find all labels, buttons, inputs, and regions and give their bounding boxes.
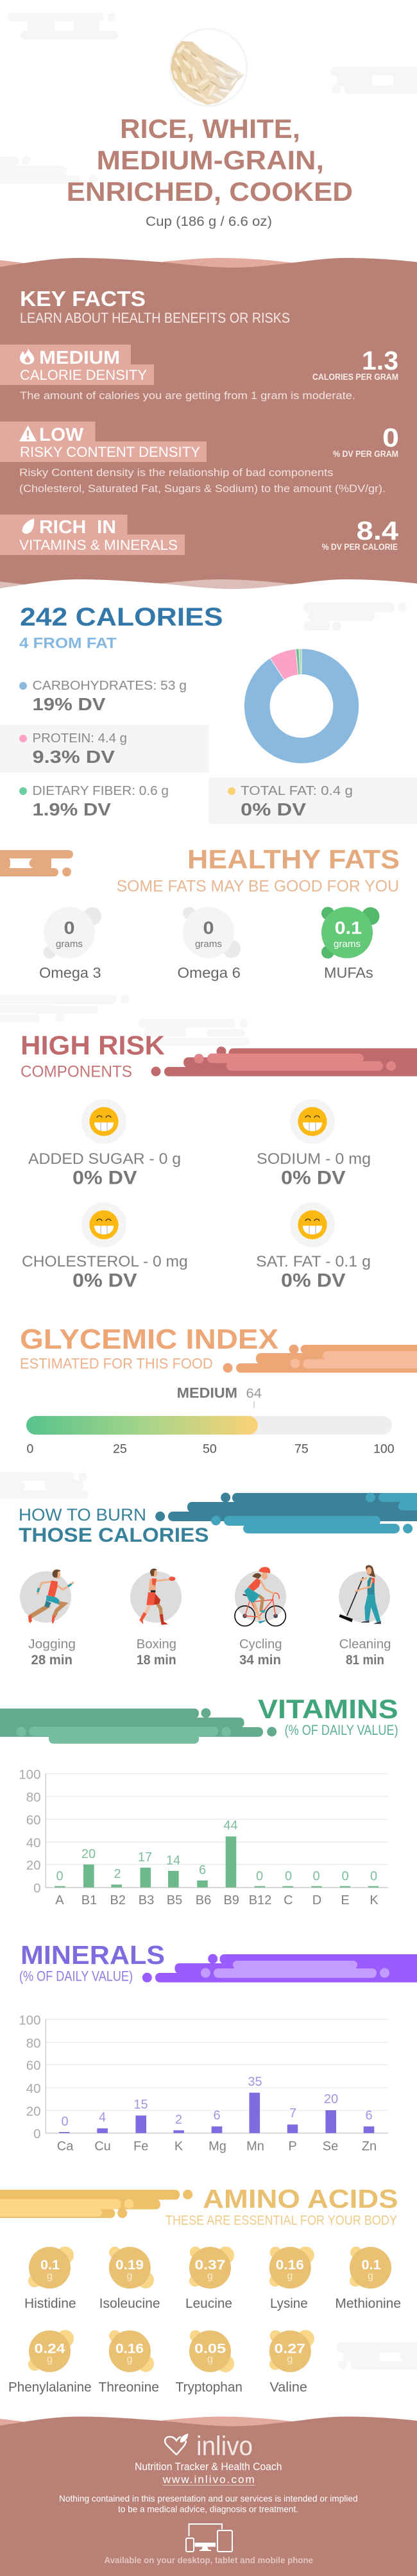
bar chart: minerals bbox=[19, 2013, 388, 2154]
amino: leucine: g bbox=[207, 2271, 213, 2282]
bar chart: vitamins: 20 bbox=[81, 1847, 96, 1861]
amino: phenylalanine: 0.24 bbox=[35, 2341, 65, 2356]
serving size: Cup (186 g / 6.6 oz) bbox=[146, 214, 272, 229]
icon: person sweeping bbox=[339, 1565, 390, 1624]
healthy fats heading: HEALTHY FATS bbox=[187, 844, 400, 874]
activity: jogging: Jogging bbox=[28, 1637, 76, 1651]
unit: calories per gram: CALORIES PER GRAM bbox=[312, 372, 398, 382]
logo: inlivo bbox=[165, 2431, 253, 2461]
icon: grinning face bbox=[81, 1099, 126, 1144]
decorative cloud: top right bbox=[330, 67, 417, 94]
decorative bars bbox=[0, 2190, 192, 2218]
bar chart: vitamins bbox=[19, 1768, 388, 1907]
bar chart: vitamins: 0 bbox=[341, 1870, 349, 1884]
icon: warning triangle bbox=[19, 425, 37, 441]
decorative cloud bbox=[336, 2342, 417, 2369]
website link: www.inlivo.com bbox=[162, 2473, 255, 2486]
bar chart: vitamins: B9 bbox=[223, 1893, 239, 1907]
unit: dv per gram: % DV PER GRAM bbox=[333, 449, 398, 459]
amino: threonine: g bbox=[127, 2354, 132, 2365]
bar chart: minerals: 20 bbox=[324, 2092, 338, 2106]
bar chart: minerals: Ca bbox=[57, 2140, 74, 2154]
unit: dv per calorie: % DV PER CALORIE bbox=[322, 542, 398, 552]
amino: methionine: Methionine bbox=[335, 2296, 401, 2311]
panel: high risk components bbox=[21, 1030, 417, 1292]
bar chart: vitamins: 0 bbox=[285, 1870, 292, 1884]
amino: leucine: 0.37 bbox=[195, 2257, 226, 2273]
amino: threonine: Threonine bbox=[98, 2380, 159, 2394]
panel: calories bbox=[0, 602, 417, 824]
calories heading: 242 CALORIES bbox=[20, 603, 223, 631]
panel: amino acids bbox=[0, 2184, 417, 2394]
legend: total fat: 0% DV bbox=[241, 799, 306, 819]
bar chart: minerals: 7 bbox=[289, 2106, 296, 2120]
stat: omega 3: grams bbox=[56, 939, 83, 950]
legend: dietary fiber bbox=[19, 784, 169, 819]
stat: omega 3 bbox=[39, 907, 101, 981]
amino: leucine: Leucine bbox=[185, 2296, 232, 2311]
components subheading: COMPONENTS bbox=[21, 1062, 132, 1080]
bar chart: minerals: 0 bbox=[61, 2115, 69, 2129]
logo: inlivo: inlivo bbox=[196, 2431, 253, 2461]
bar chart: minerals: 6 bbox=[213, 2108, 221, 2122]
availability note: Available on your desktop, tablet and mobile phone bbox=[104, 2555, 313, 2565]
item: added sugar: ADDED SUGAR - 0 g bbox=[28, 1150, 181, 1168]
decorative cloud bbox=[0, 1472, 89, 1499]
bar chart: minerals: Se bbox=[323, 2140, 338, 2154]
amino: isoleucine bbox=[99, 2247, 160, 2311]
amino: valine: g bbox=[287, 2354, 293, 2365]
description bbox=[19, 466, 386, 495]
bar chart: vitamins: 0 bbox=[256, 1870, 263, 1884]
title: RICE, WHITE, bbox=[120, 114, 300, 144]
bar chart: vitamins: 0 bbox=[33, 1881, 41, 1896]
legend highlight: protein row bbox=[0, 725, 209, 772]
amino: phenylalanine: Phenylalanine bbox=[8, 2380, 92, 2394]
bar chart: vitamins: 17 bbox=[138, 1850, 152, 1864]
icon: devices bbox=[186, 2524, 232, 2552]
activity: cycling bbox=[235, 1567, 286, 1668]
label: vitamins and minerals: VITAMINS & MINERALS bbox=[19, 537, 178, 553]
icon: grinning face bbox=[81, 1202, 126, 1247]
item: added sugar bbox=[28, 1099, 181, 1189]
bar chart: minerals: 20 bbox=[26, 2104, 41, 2119]
legend: carbohydrates bbox=[19, 679, 187, 714]
high risk heading: HIGH RISK bbox=[21, 1030, 165, 1060]
healthy fats subheading: SOME FATS MAY BE GOOD FOR YOU bbox=[117, 878, 399, 896]
stat: omega 6: 0 bbox=[203, 917, 214, 938]
rating value: 64 bbox=[246, 1386, 262, 1401]
how to burn heading: HOW TO BURN bbox=[19, 1505, 146, 1524]
amino: threonine bbox=[98, 2330, 159, 2394]
amino: lysine: g bbox=[287, 2271, 293, 2282]
bar chart: minerals: 15 bbox=[133, 2098, 148, 2112]
amino: valine: Valine bbox=[269, 2380, 307, 2394]
item: saturated fat bbox=[256, 1202, 371, 1292]
fact: calorie density bbox=[0, 345, 398, 402]
stat: mufas bbox=[321, 907, 380, 981]
those calories heading: THOSE CALORIES bbox=[19, 1523, 209, 1546]
amino: valine: 0.27 bbox=[275, 2341, 305, 2356]
amino: tryptophan: g bbox=[207, 2354, 213, 2365]
gauge bar bbox=[26, 1416, 392, 1435]
glycemic index heading: GLYCEMIC INDEX bbox=[20, 1324, 278, 1355]
item: cholesterol: CHOLESTEROL - 0 mg bbox=[22, 1253, 188, 1270]
amino: histidine: g bbox=[47, 2271, 53, 2282]
decorative bars bbox=[223, 1345, 417, 1373]
amino: isoleucine: 0.19 bbox=[115, 2257, 144, 2273]
bar chart: minerals: 100 bbox=[19, 2013, 41, 2027]
icon: grinning face bbox=[290, 1099, 335, 1144]
panel: minerals bbox=[19, 1940, 417, 2154]
item: saturated fat: SAT. FAT - 0.1 g bbox=[256, 1253, 371, 1270]
bar chart: vitamins: 44 bbox=[223, 1819, 238, 1833]
amino: valine bbox=[269, 2330, 314, 2394]
title bbox=[67, 114, 353, 207]
bar chart: vitamins: B6 bbox=[196, 1893, 211, 1907]
amino: isoleucine: Isoleucine bbox=[99, 2296, 160, 2311]
bar chart: minerals: 4 bbox=[99, 2111, 106, 2125]
activity: cycling: Cycling bbox=[239, 1637, 282, 1651]
bar chart: vitamins: B1 bbox=[81, 1893, 97, 1907]
rating label: MEDIUM bbox=[177, 1385, 237, 1401]
activity: boxing bbox=[130, 1569, 182, 1668]
bar chart: vitamins: 2 bbox=[114, 1867, 121, 1881]
stat: mufas: MUFAs bbox=[324, 964, 373, 981]
item: cholesterol bbox=[22, 1202, 188, 1292]
amino: tryptophan bbox=[176, 2330, 243, 2394]
bar chart: vitamins: 14 bbox=[166, 1854, 180, 1868]
disclaimer bbox=[59, 2493, 358, 2514]
amino: lysine: 0.16 bbox=[276, 2257, 304, 2273]
wave bottom of key facts bbox=[0, 579, 417, 597]
disclaimer: Nothing contained in this presentation and our services is intended or implied bbox=[59, 2493, 358, 2503]
legend: carbohydrates: 19% DV bbox=[32, 694, 106, 714]
item: saturated fat: 0% DV bbox=[281, 1270, 346, 1292]
panel: footer bbox=[0, 2416, 417, 2576]
activity: jogging: 28 min bbox=[31, 1653, 72, 1668]
amino: lysine: Lysine bbox=[270, 2296, 308, 2311]
bar chart: vitamins: 100 bbox=[19, 1768, 41, 1782]
legend: total fat bbox=[228, 784, 353, 819]
legend: protein: 9.3% DV bbox=[32, 747, 115, 767]
panel: how to burn those calories bbox=[19, 1492, 417, 1668]
key facts heading: KEY FACTS bbox=[20, 287, 146, 311]
item: sodium: 0% DV bbox=[281, 1168, 346, 1189]
bar chart: vitamins: E bbox=[341, 1893, 350, 1907]
bar chart: minerals: K bbox=[174, 2140, 183, 2154]
bar chart: minerals: Zn bbox=[362, 2140, 377, 2154]
rating: low: LOW bbox=[39, 425, 84, 445]
bar chart: minerals: 0 bbox=[33, 2127, 41, 2142]
activity: cleaning: 81 min bbox=[346, 1653, 384, 1668]
bar chart: minerals: 35 bbox=[248, 2075, 262, 2089]
amino: leucine bbox=[185, 2247, 234, 2311]
legend: protein bbox=[19, 731, 127, 767]
bar chart: vitamins: B5 bbox=[167, 1893, 182, 1907]
key facts subheading: LEARN ABOUT HEALTH BENEFITS OR RISKS bbox=[20, 310, 290, 326]
amino: threonine: 0.16 bbox=[115, 2341, 144, 2356]
amino: phenylalanine bbox=[8, 2330, 92, 2394]
stat: mufas: 0.1 bbox=[335, 917, 362, 938]
icon: leaf bbox=[22, 518, 34, 534]
activity: cycling: 34 min bbox=[239, 1653, 281, 1668]
donut chart bbox=[244, 649, 359, 763]
amino: methionine: g bbox=[368, 2271, 373, 2282]
activity: cleaning bbox=[339, 1565, 391, 1668]
food photo: rice in circle bbox=[169, 29, 247, 107]
decorative cloud bbox=[303, 602, 407, 631]
description: The amount of calories you are getting from 1 gram is moderate. bbox=[20, 389, 355, 402]
gauge scale labels: 75 bbox=[294, 1442, 309, 1456]
bar chart: vitamins: 0 bbox=[312, 1870, 320, 1884]
decorative bars bbox=[0, 850, 73, 876]
description: (Cholesterol, Saturated Fat, Sugars & Sodium) to the amount (%DV/gr). bbox=[19, 482, 386, 495]
icon: flame bbox=[20, 348, 34, 364]
bar chart: vitamins: 6 bbox=[199, 1863, 206, 1877]
item: sodium: SODIUM - 0 mg bbox=[257, 1150, 371, 1168]
stat: omega 6: Omega 6 bbox=[177, 964, 241, 981]
value: 8.4: 8.4 bbox=[357, 516, 398, 545]
vitamins heading: VITAMINS bbox=[258, 1694, 398, 1724]
wave top of footer bbox=[0, 2416, 417, 2576]
legend: total fat: TOTAL FAT: 0.4 g bbox=[241, 784, 353, 798]
bar chart: minerals: Mg bbox=[208, 2140, 226, 2154]
item: added sugar: 0% DV bbox=[72, 1168, 137, 1189]
title: ENRICHED, COOKED bbox=[67, 176, 353, 207]
stat: omega 3: Omega 3 bbox=[39, 964, 101, 981]
decorative bars bbox=[142, 1954, 417, 1983]
bar chart: minerals: 40 bbox=[26, 2081, 41, 2096]
gauge scale labels: 25 bbox=[113, 1442, 127, 1456]
stat: mufas: grams bbox=[334, 939, 361, 950]
bar chart: vitamins: C bbox=[284, 1893, 293, 1907]
amino acids heading: AMINO ACIDS bbox=[203, 2184, 398, 2213]
legend: carbohydrates: CARBOHYDRATES: 53 g bbox=[32, 679, 187, 693]
bar chart: vitamins: B12 bbox=[249, 1893, 271, 1907]
fact: risky content density bbox=[0, 422, 399, 495]
bar chart: minerals: 2 bbox=[175, 2113, 182, 2127]
bar chart: minerals: P bbox=[288, 2140, 297, 2154]
minerals subheading: (% OF DAILY VALUE) bbox=[19, 1968, 133, 1984]
fact: rich in vitamins and minerals bbox=[0, 515, 398, 555]
legend highlight: total fat row bbox=[208, 778, 417, 824]
glycemic subheading: ESTIMATED FOR THIS FOOD bbox=[20, 1355, 213, 1372]
decorative cloud: mid left bbox=[0, 156, 98, 184]
activity: cleaning: Cleaning bbox=[339, 1637, 391, 1651]
amino: lysine bbox=[269, 2247, 314, 2311]
rating: medium: MEDIUM bbox=[39, 348, 120, 368]
value: 1.3: 1.3 bbox=[362, 346, 398, 375]
icon: heart with leaf bbox=[165, 2434, 189, 2455]
amino: tryptophan: 0.05 bbox=[194, 2341, 226, 2356]
decorative cloud: top left bbox=[7, 13, 118, 40]
from fat subheading: 4 FROM FAT bbox=[19, 635, 117, 651]
item: cholesterol: 0% DV bbox=[72, 1270, 137, 1292]
decorative bars bbox=[155, 1492, 417, 1533]
scale marker bbox=[253, 1401, 255, 1408]
wave top of key facts bbox=[0, 258, 417, 593]
amino: methionine bbox=[335, 2247, 401, 2311]
bar chart: vitamins: K bbox=[370, 1893, 379, 1907]
bar chart: vitamins: B3 bbox=[139, 1893, 154, 1907]
bar chart: vitamins: 60 bbox=[26, 1813, 41, 1828]
bar chart: vitamins: 0 bbox=[370, 1870, 377, 1884]
rating: rich in: RICH IN bbox=[39, 517, 116, 538]
tagline: Nutrition Tracker & Health Coach bbox=[135, 2461, 282, 2473]
panel: key facts bbox=[0, 258, 417, 597]
bar chart: minerals: Fe bbox=[133, 2140, 148, 2154]
amino: histidine bbox=[24, 2247, 76, 2311]
activity: boxing: Boxing bbox=[137, 1637, 176, 1651]
value: 0: 0 bbox=[382, 423, 399, 452]
gauge scale labels: 100 bbox=[373, 1442, 395, 1456]
bar chart: minerals: Mn bbox=[246, 2140, 264, 2154]
amino: phenylalanine: g bbox=[47, 2354, 53, 2365]
decorative bars bbox=[0, 1708, 277, 1744]
disclaimer: to be a medical advice, diagnosis or treatment. bbox=[118, 2504, 298, 2514]
bar chart: vitamins: 40 bbox=[26, 1836, 41, 1850]
amino: methionine: 0.1 bbox=[362, 2257, 381, 2273]
legend: dietary fiber: 1.9% DV bbox=[32, 799, 111, 819]
label: risky content density: RISKY CONTENT DENSITY bbox=[20, 444, 200, 460]
panel: glycemic index bbox=[20, 1324, 417, 1456]
bar chart: vitamins: B2 bbox=[110, 1893, 126, 1907]
icon: boxer bbox=[130, 1569, 182, 1625]
gauge scale labels: 50 bbox=[203, 1442, 217, 1456]
bar chart: minerals: Cu bbox=[94, 2140, 111, 2154]
stat: omega 6 bbox=[177, 907, 241, 981]
bar chart: vitamins: 0 bbox=[56, 1870, 64, 1884]
bar chart: minerals: 80 bbox=[26, 2036, 41, 2051]
legend: protein: PROTEIN: 4.4 g bbox=[32, 731, 127, 746]
bar chart: vitamins: 80 bbox=[26, 1790, 41, 1805]
activity: jogging bbox=[20, 1569, 76, 1668]
activity: boxing: 18 min bbox=[137, 1653, 176, 1668]
minerals heading: MINERALS bbox=[21, 1940, 165, 1970]
item: sodium bbox=[257, 1099, 371, 1189]
legend: dietary fiber: DIETARY FIBER: 0.6 g bbox=[32, 784, 169, 798]
description: Risky Content density is the relationship of bad components bbox=[19, 466, 334, 479]
label: calorie density: CALORIE DENSITY bbox=[20, 367, 147, 383]
icon: jogger bbox=[20, 1569, 74, 1624]
icon: grinning face bbox=[290, 1202, 335, 1247]
bar chart: vitamins: 20 bbox=[26, 1858, 41, 1873]
panel: vitamins bbox=[0, 1694, 398, 1907]
title: MEDIUM-GRAIN, bbox=[96, 145, 324, 175]
amino: isoleucine: g bbox=[127, 2271, 132, 2282]
decorative clouds: before high risk bbox=[0, 994, 250, 1046]
decorative bars bbox=[151, 1046, 417, 1077]
bar chart: vitamins: A bbox=[55, 1893, 64, 1907]
gauge scale labels: 0 bbox=[27, 1442, 33, 1456]
panel: healthy fats bbox=[0, 844, 400, 981]
bar chart: minerals: 6 bbox=[365, 2108, 373, 2122]
amino: histidine: Histidine bbox=[24, 2296, 76, 2311]
gauge scale labels bbox=[27, 1442, 395, 1456]
bar chart: minerals: 60 bbox=[26, 2058, 41, 2073]
icon: cyclist bbox=[235, 1567, 286, 1626]
amino: histidine: 0.1 bbox=[40, 2257, 60, 2273]
stat: omega 3: 0 bbox=[64, 917, 74, 938]
stat: omega 6: grams bbox=[195, 939, 222, 950]
bar chart: vitamins: D bbox=[312, 1893, 321, 1907]
amino: tryptophan: Tryptophan bbox=[176, 2380, 243, 2394]
